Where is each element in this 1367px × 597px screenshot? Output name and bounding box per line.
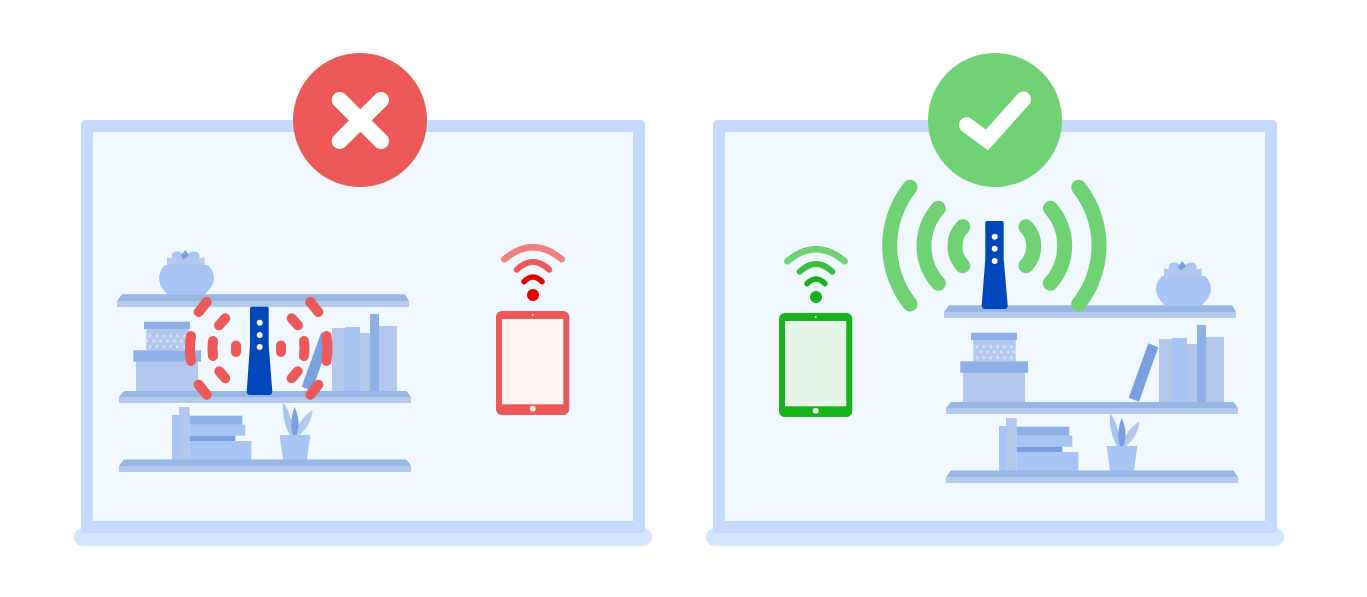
panel: bad placement (74, 53, 652, 546)
weak signal dashes (190, 302, 328, 395)
icon: tablet (red) (496, 311, 569, 415)
middle shelf (119, 391, 411, 403)
icon: router (weak) (247, 307, 272, 395)
shelves scene: right (944, 261, 1238, 483)
upright books (1129, 325, 1224, 402)
icon: weak wifi (504, 247, 562, 301)
icon: router (strong) (982, 221, 1008, 309)
monitor screen: right (725, 132, 1265, 521)
lying books (172, 407, 251, 460)
strong signal waves (890, 187, 1099, 304)
potted plant (280, 402, 312, 460)
succulent bowl (1156, 261, 1211, 305)
stacked boxes (960, 333, 1028, 402)
icon: tablet (green) (779, 313, 852, 417)
succulent bowl (159, 250, 214, 294)
middle shelf (946, 402, 1238, 414)
top shelf (944, 305, 1236, 318)
icon: red cross badge (293, 53, 427, 187)
panel: good placement (706, 53, 1284, 546)
icon: green check badge (928, 53, 1062, 187)
lying books (999, 418, 1078, 470)
bottom shelf (119, 460, 411, 472)
monitor frame: left (81, 120, 645, 533)
monitor frame: right (713, 120, 1277, 533)
icon: strong wifi (787, 249, 845, 303)
upright books (302, 314, 397, 391)
monitor screen: left (93, 132, 633, 521)
shelves scene: left (117, 250, 411, 472)
bottom shelf (946, 470, 1238, 483)
monitor base: right (706, 528, 1284, 546)
top shelf (117, 294, 409, 307)
monitor base: left (74, 528, 652, 546)
potted plant (1107, 413, 1140, 470)
stacked boxes (133, 322, 201, 391)
